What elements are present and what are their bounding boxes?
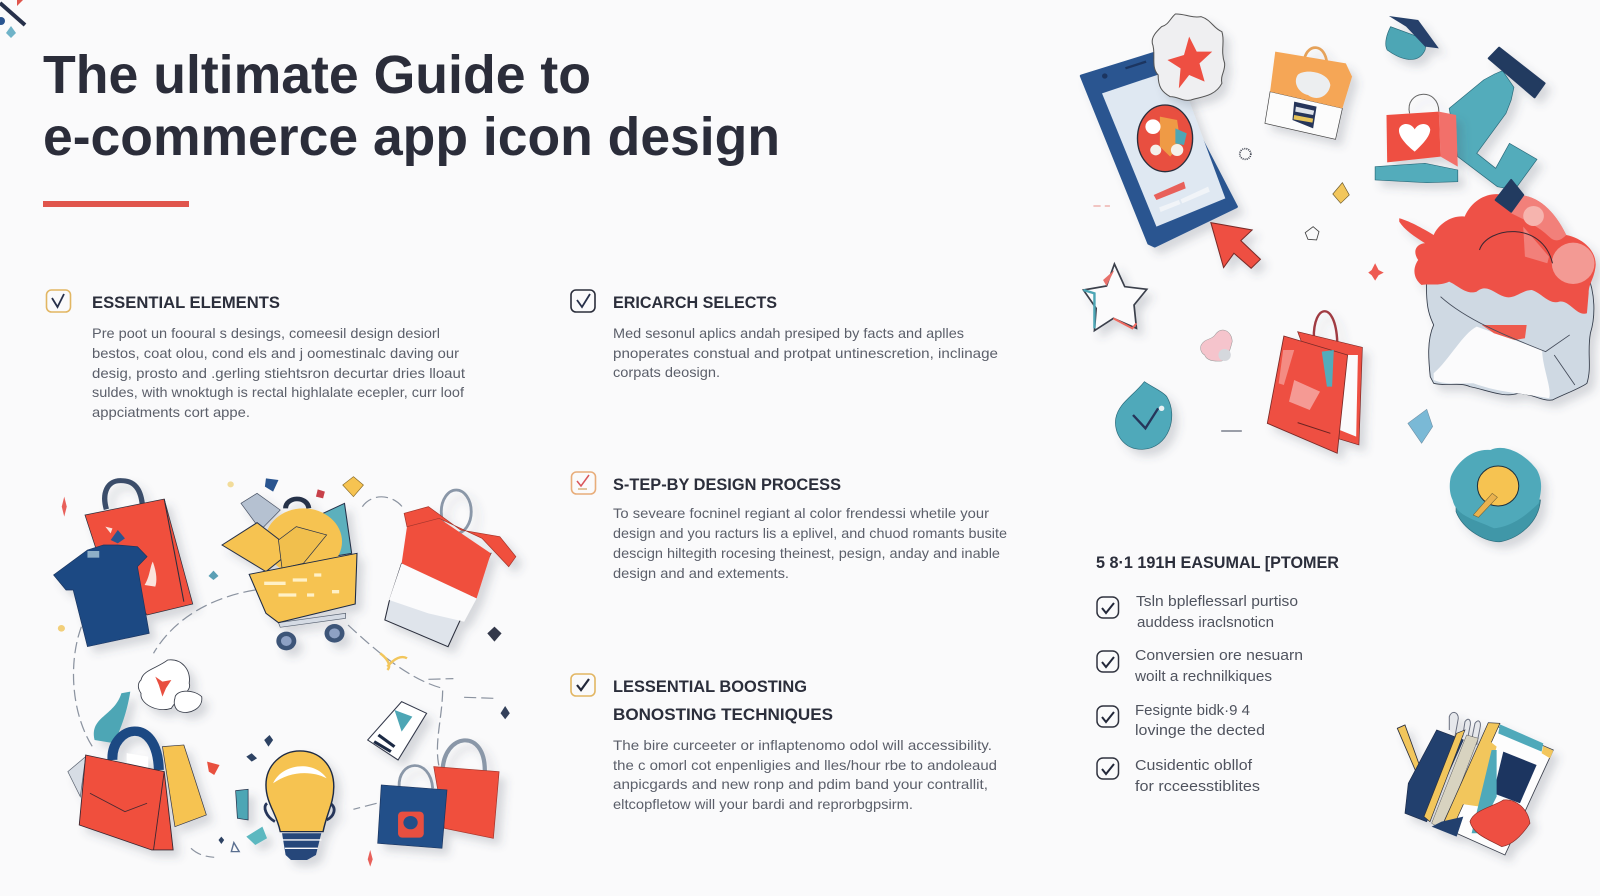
- heading: boosting techniques: LESSENTIAL BOOSTING: [613, 677, 807, 696]
- checklist item 4: Cusidentic obllof: [1135, 757, 1253, 774]
- icon: bag and t-shirt: [54, 481, 193, 647]
- dashed connectors: [73, 497, 494, 857]
- icon: photo book: [1432, 723, 1553, 855]
- heading: boosting techniques: BONOSTING TECHNIQUES: [613, 705, 833, 724]
- checklist item 3: lovinge the dected: [1135, 722, 1265, 739]
- icon: envelope with red cloud: [1399, 180, 1596, 400]
- text block: step-by design process: To seveare focninel regiant al color frendessi whetile your: [613, 505, 989, 521]
- icon: light bulb: [236, 751, 334, 860]
- checklist item 1: auddess iraclsnoticn: [1137, 614, 1274, 631]
- decorative sparkles: [1093, 149, 1384, 281]
- text block: essential elements: [92, 325, 465, 420]
- text block: boosting techniques: The bire curceeter or inflaptenomo odol will accessibility.: [613, 737, 992, 753]
- icon: thought cloud: [138, 660, 202, 712]
- icon: red shopping bag: [1267, 311, 1362, 453]
- checklist item 2: woilt a rechnilkiques: [1134, 668, 1272, 685]
- icon: star badge: [1152, 14, 1225, 100]
- title underline: [43, 201, 189, 207]
- decorative sparkles: [58, 477, 510, 867]
- text block: essential elements: Pre poot un fooural s desings, comeesil design desiorl: [92, 325, 440, 341]
- text block: essential elements: suldes, with wnoktugh is rectal highlalate ecepler, curr loof: [92, 384, 464, 400]
- illustration: phone and icons cluster: [1081, 14, 1596, 400]
- icon: checkbox gold: [46, 290, 70, 312]
- icon: blue star gem: [1408, 409, 1433, 443]
- heading: checklist: 5 8·1 191H EASUMAL [PTOMER: [1096, 553, 1339, 572]
- text block: boosting techniques: [613, 737, 997, 812]
- text block: ericarch selects: [613, 325, 998, 380]
- icon: navy notebook: [1405, 730, 1463, 822]
- title: e-commerce app icon design: [43, 107, 780, 167]
- icon: beige book spine: [1432, 735, 1478, 830]
- checklist item 4: [1097, 757, 1260, 795]
- icon: graduation cap: [1386, 16, 1439, 59]
- checklist item 2: Conversien ore nesuarn: [1135, 647, 1303, 664]
- icon: pencil: [1397, 725, 1428, 795]
- icon: teal tool: [1449, 48, 1545, 190]
- checklist item 1: [1097, 593, 1298, 631]
- icon: two bags: [378, 740, 499, 848]
- text block: step-by design process: design and you racturs lis a eplivel, and chuod romants busite: [613, 525, 1007, 541]
- icon: checkbox gold dark check: [571, 674, 595, 696]
- heading: step-by design process: S-TEP-BY DESIGN PROCESS: [613, 475, 841, 494]
- dash mark: [1221, 428, 1242, 434]
- panel: step-by design process: [572, 472, 1007, 581]
- illustration: books and pencils: [1397, 712, 1553, 855]
- text block: step-by design process: design and and extements.: [613, 565, 789, 581]
- text block: essential elements: bestos, coat olou, cond els and j oomestinalc daving our: [92, 345, 459, 361]
- icon: cursor arrow: [1211, 223, 1260, 268]
- icon: checkbox dark: [571, 290, 595, 312]
- panel: checklist: [1096, 553, 1339, 795]
- icon: heart bag: [1375, 94, 1458, 183]
- text block: boosting techniques: anpicgards and new ronp and pdim band your contrallit,: [613, 776, 988, 792]
- icon: gift box: [385, 490, 516, 647]
- icon: corner decoration: [0, 0, 25, 38]
- icon: phone card: [368, 702, 427, 760]
- icon: star outline: [1083, 264, 1147, 331]
- icon: yellow ruler: [1424, 730, 1465, 822]
- text block: ericarch selects: corpats deosign.: [613, 364, 720, 380]
- title: [43, 45, 780, 167]
- text block: ericarch selects: pnoperates constual and protpat untinescretion, inclinage: [613, 345, 998, 361]
- panel: boosting techniques: [571, 674, 997, 812]
- icon: pink flower: [1201, 330, 1232, 361]
- panel: essential elements: [46, 290, 465, 420]
- heading: boosting techniques: [613, 677, 833, 724]
- text block: boosting techniques: eltcopfletow will your bardi and reprorbgpsirm.: [613, 796, 913, 812]
- checklist item 2: [1097, 647, 1303, 685]
- checklist item 3: Fesignte bidk·9 4: [1135, 702, 1250, 719]
- text block: step-by design process: [613, 505, 1007, 581]
- checklist item 1: Tsln bpleflessarl purtiso: [1136, 593, 1298, 610]
- text block: essential elements: appciatments cort appe.: [92, 404, 250, 420]
- panel: ericarch selects: [571, 290, 998, 380]
- text block: boosting techniques: the c omorl cot enpenligies and lles/hour rbe to andoleaud: [613, 757, 997, 773]
- icon: shopping cart: [222, 493, 357, 650]
- icon: pens: [1449, 712, 1480, 745]
- heading: ericarch selects: ERICARCH SELECTS: [613, 293, 777, 312]
- icon: teal lamp badge: [1450, 448, 1541, 542]
- heading: essential elements: ESSENTIAL ELEMENTS: [92, 293, 280, 312]
- checklist item 4: for rcceesstiblites: [1135, 778, 1260, 795]
- icon: phone: [1081, 53, 1236, 246]
- checklist item 3: [1097, 702, 1265, 739]
- text block: step-by design process: descign hiltegith rocesing theinest, pesign, anday and inable: [613, 545, 1000, 561]
- title: The ultimate Guide to: [43, 45, 591, 105]
- text block: ericarch selects: Med sesonul aplics andah presiped by facts and aplles: [613, 325, 964, 341]
- illustration: shopping icons cluster: [54, 477, 516, 867]
- icon: teal check badge: [1115, 382, 1172, 449]
- icon: filled tote bags: [68, 692, 206, 850]
- illustration: lower right icons: [1083, 264, 1541, 542]
- icon: checkbox orange: [572, 472, 596, 494]
- text block: essential elements: desig, prosto and .gerling stiehtsron decurtar dries lloaut: [92, 365, 465, 381]
- icon: orange bag: [1265, 48, 1352, 139]
